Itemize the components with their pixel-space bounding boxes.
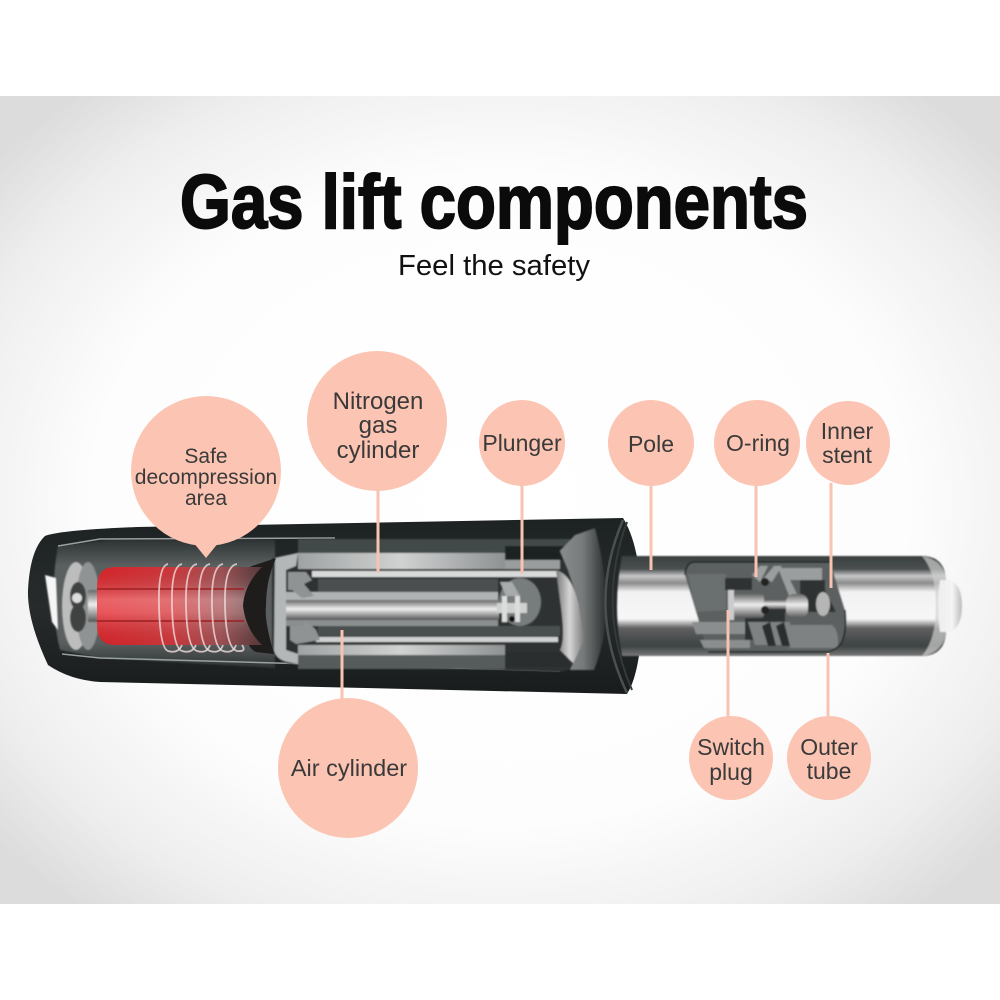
callout: pole [608, 400, 694, 486]
callout: plunger [479, 400, 565, 486]
funnel [560, 528, 606, 670]
callout: nitrogen gas cylinder [307, 351, 447, 491]
cutaway section [685, 562, 846, 652]
callout: outer tube: tube [807, 758, 851, 784]
dark seal ring [240, 558, 276, 654]
callout: air cylinder [278, 698, 418, 838]
callout: switch plug: Switch [697, 734, 765, 760]
callout: o-ring [714, 400, 800, 486]
end collar [556, 570, 590, 665]
callout: plunger: Plunger [482, 430, 562, 456]
callout: outer tube: Outer [800, 734, 858, 760]
front face rings [605, 520, 627, 693]
outer cylinder body [28, 518, 642, 694]
callout: safe decompression area [131, 396, 281, 558]
callout: air cylinder: Air cylinder [291, 755, 407, 781]
callout: pole: Pole [628, 431, 674, 457]
callout: safe decompression area: Safe [184, 445, 228, 468]
callout: safe decompression area: decompression [135, 466, 277, 489]
callout: nitrogen gas cylinder: Nitrogen [333, 388, 423, 415]
callout: o-ring: O-ring [726, 430, 790, 456]
callout: nitrogen gas cylinder: gas [359, 412, 397, 439]
callout: inner stent: Inner [821, 418, 874, 444]
leader lines [342, 483, 831, 718]
callout: switch plug [689, 716, 773, 800]
callout: safe decompression area: area [185, 487, 227, 510]
inner cavity [53, 540, 275, 668]
spring coils [159, 564, 244, 652]
callout: inner stent: stent [822, 442, 873, 468]
callout: inner stent [806, 401, 890, 485]
title: Gas lift components [180, 160, 808, 245]
callout: nitrogen gas cylinder: cylinder [337, 437, 419, 464]
callout: outer tube [787, 716, 871, 800]
valve at left end [45, 562, 100, 650]
pole and inner tube [617, 556, 962, 656]
cap tip [938, 580, 962, 632]
callout: switch plug: plug [709, 759, 753, 785]
red decompression chamber [97, 567, 262, 645]
subtitle: Feel the safety [398, 250, 590, 282]
metal inner cylinder [272, 528, 606, 672]
gas lift illustration [28, 518, 962, 694]
stepped blocks [288, 572, 320, 644]
metal rim [274, 553, 298, 664]
plunger head [497, 578, 541, 626]
